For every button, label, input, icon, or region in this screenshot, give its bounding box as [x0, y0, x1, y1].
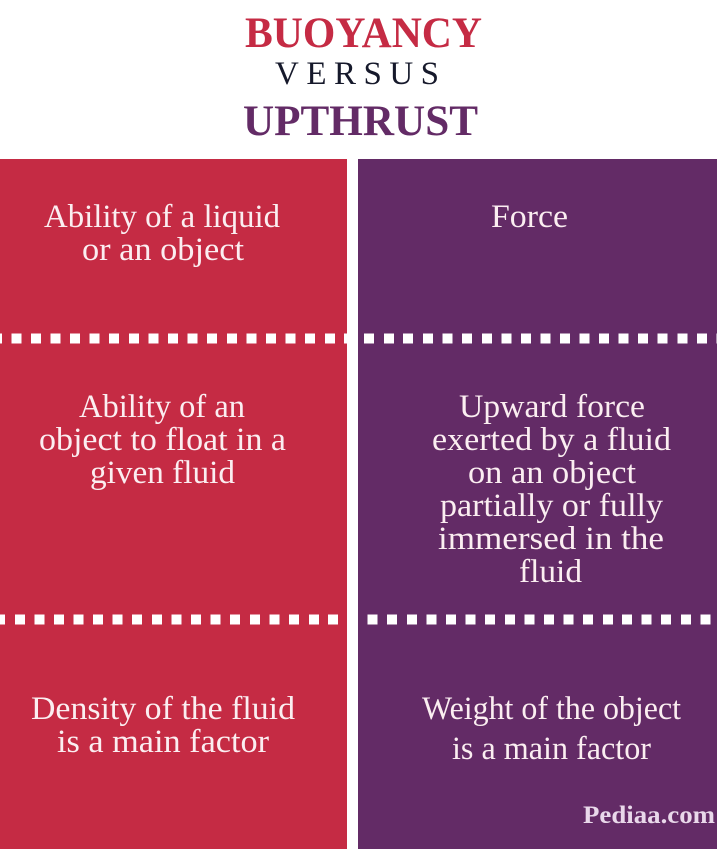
- text: buoyancy row 3: is a main factor: [57, 724, 269, 760]
- text: upthrust row 3: is a main factor: [452, 731, 651, 767]
- text: buoyancy row 2: given fluid: [90, 455, 235, 491]
- text: upthrust row 2: Upward force: [459, 389, 645, 425]
- title: [243, 10, 482, 145]
- text: buoyancy row 3: Density of the fluid: [31, 691, 296, 727]
- text: upthrust row 1: Force: [491, 199, 568, 235]
- panel: buoyancy column: [0, 159, 347, 849]
- text: upthrust row 2: on an object: [468, 455, 636, 491]
- text: upthrust row 2: [432, 389, 672, 590]
- text: upthrust row 2: exerted by a fluid: [432, 422, 672, 458]
- heading: upthrust: UPTHRUST: [243, 98, 478, 145]
- text: buoyancy row 1: or an object: [82, 232, 244, 268]
- heading: versus: VERSUS: [275, 56, 439, 92]
- dotted divider: upper: [0, 334, 717, 344]
- text: buoyancy row 2: object to float in a: [39, 422, 286, 458]
- text: buoyancy row 2: Ability of an: [79, 389, 245, 425]
- text: upthrust row 3: Weight of the object: [422, 691, 681, 727]
- text: buoyancy row 2: [39, 389, 286, 491]
- text: upthrust row 2: immersed in the: [438, 521, 664, 557]
- text: upthrust row 2: fluid: [519, 554, 583, 590]
- text: buoyancy row 3: [31, 691, 296, 760]
- text: upthrust row 2: partially or fully: [440, 488, 664, 524]
- panel: upthrust column: [358, 159, 717, 849]
- text: buoyancy row 1: [44, 199, 280, 268]
- heading: buoyancy: BUOYANCY: [245, 10, 482, 57]
- dotted divider: lower: [0, 614, 710, 624]
- watermark: Pediaa.com: Pediaa.com: [583, 802, 715, 829]
- text: buoyancy row 1: Ability of a liquid: [44, 199, 280, 235]
- text: upthrust row 3: [422, 691, 681, 767]
